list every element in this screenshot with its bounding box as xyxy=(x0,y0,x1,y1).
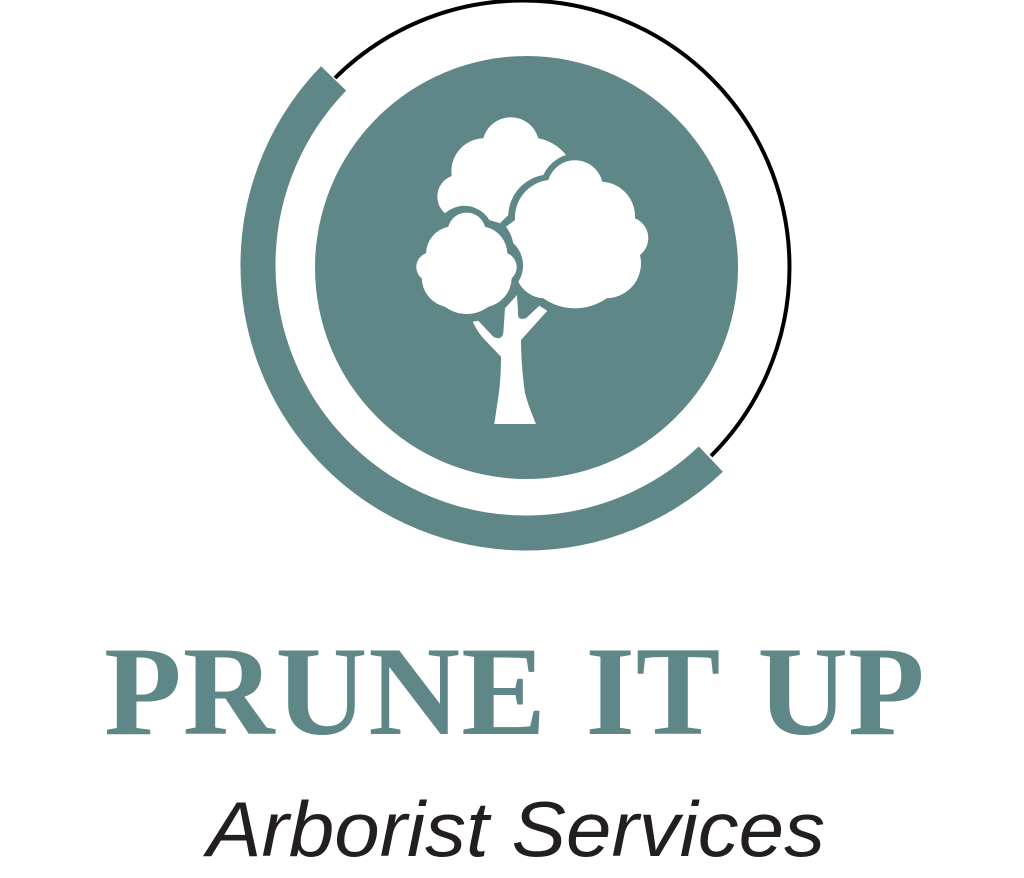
title: UP xyxy=(758,622,924,762)
trunk and branches xyxy=(473,295,547,424)
title: PRUNE xyxy=(104,622,546,762)
thin black arc xyxy=(335,1,789,456)
subtitle: Arborist Services xyxy=(203,785,825,873)
right crown xyxy=(506,160,648,308)
title: IT xyxy=(586,622,720,762)
thick teal arc xyxy=(147,0,905,644)
teal disc xyxy=(315,56,738,479)
icon: tree xyxy=(416,117,648,424)
title xyxy=(104,622,924,762)
back crown xyxy=(437,117,566,223)
left crown xyxy=(416,213,517,314)
